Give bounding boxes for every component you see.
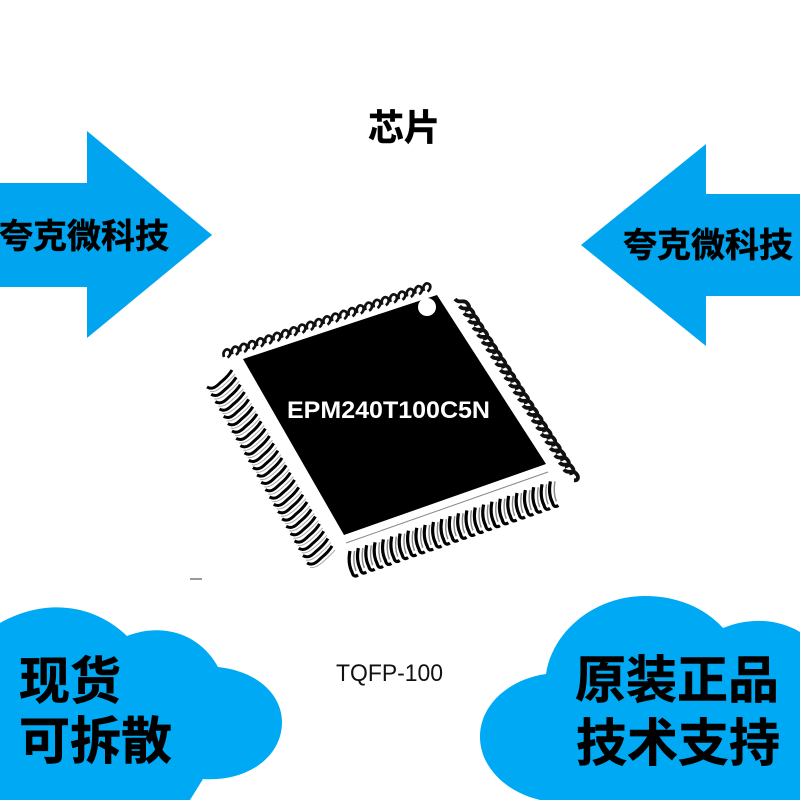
pin 1 marker xyxy=(418,298,436,316)
right pins xyxy=(455,299,578,480)
package label: TQFP-100 xyxy=(336,660,443,687)
cloud text line 1: 原装正品 xyxy=(575,652,779,709)
package edge line xyxy=(346,472,548,543)
left pins xyxy=(207,370,335,568)
cloud text line 2: 技术支持 xyxy=(576,715,780,772)
bottom pins xyxy=(349,481,558,576)
arrow shape: left-pointing xyxy=(581,144,800,346)
chip body xyxy=(243,295,546,535)
cloud shape xyxy=(0,607,282,800)
part number: EPM240T100C5N xyxy=(287,397,490,424)
cloud text line 1: 现货 xyxy=(19,653,121,710)
cloud text line 2: 可拆散 xyxy=(19,713,172,770)
right cloud callout xyxy=(480,596,800,800)
right arrow label: 夸克微科技 xyxy=(623,227,793,265)
left cloud callout xyxy=(0,607,282,800)
title: 芯片 xyxy=(368,107,440,148)
clipped residue marks xyxy=(190,578,202,580)
top pins xyxy=(224,283,430,358)
chip illustration xyxy=(190,283,578,579)
cloud shape xyxy=(480,596,800,800)
arrow shape: right-pointing xyxy=(0,131,212,338)
left arrow with brand label xyxy=(0,131,212,338)
left arrow label: 夸克微科技 xyxy=(0,218,169,256)
right arrow with brand label xyxy=(581,144,800,346)
